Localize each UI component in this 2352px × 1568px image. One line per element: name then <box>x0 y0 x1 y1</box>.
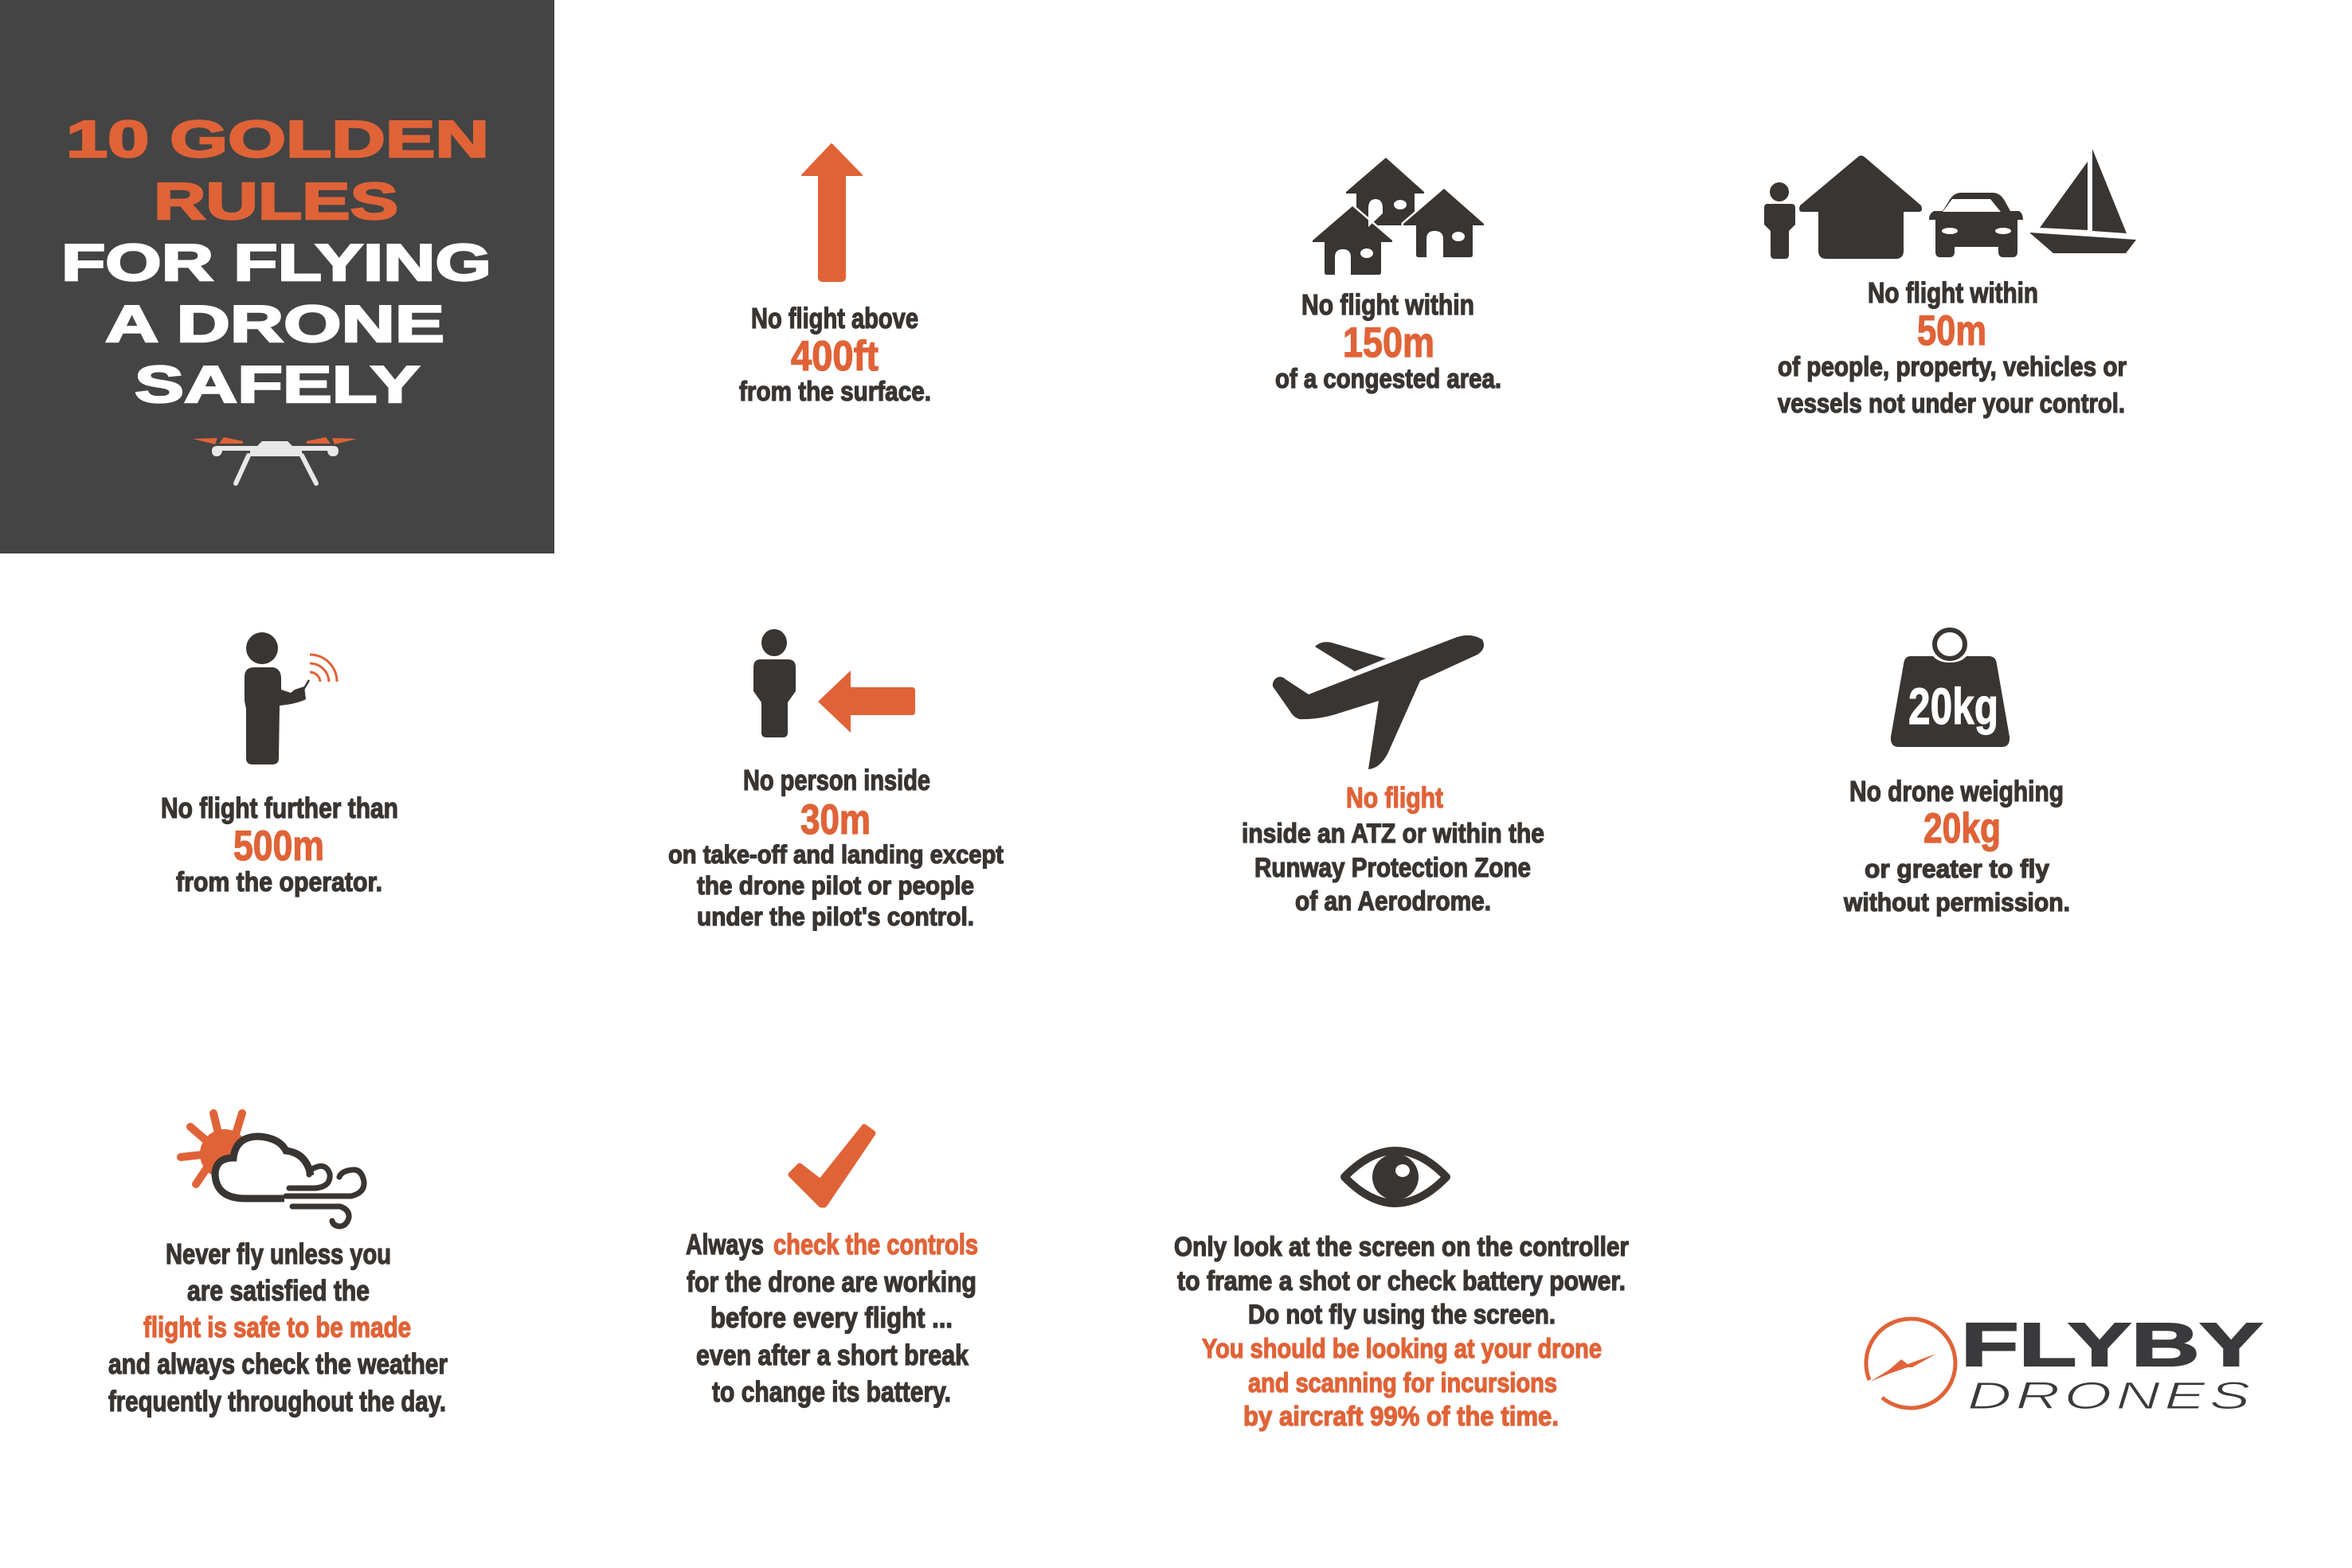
text: rule weather: and always check the weather <box>108 1347 448 1380</box>
text: rule weather <box>108 1238 448 1417</box>
icon: houses <box>1313 158 1484 275</box>
panel: rule aerodrome <box>1242 635 1544 917</box>
icon: operator with controller <box>245 632 337 764</box>
title <box>61 110 491 413</box>
text: rule screen: and scanning for incursions <box>1248 1368 1557 1398</box>
icon: drone <box>193 437 357 483</box>
icon: person <box>1764 182 1795 259</box>
panel: rule weather <box>108 1113 448 1417</box>
text: rule 50m: 50m <box>1917 307 1986 354</box>
icon group: person and arrow <box>753 629 915 737</box>
text: rule 30m: No person inside <box>743 764 930 796</box>
text: rule aerodrome: Runway Protection Zone <box>1254 853 1531 883</box>
text: rule weather: flight is safe to be made <box>143 1311 411 1343</box>
text: rule aerodrome <box>1242 781 1544 917</box>
icon: airplane <box>1273 635 1484 769</box>
text: rule 20kg: No drone weighing <box>1849 775 2064 807</box>
text: rule 50m <box>1778 276 2127 419</box>
logo: Flyby Drones <box>1866 1311 2263 1417</box>
icon: up arrow <box>802 144 862 281</box>
text: rule 50m: of people, property, vehicles or <box>1778 352 2127 382</box>
icon: weight <box>1891 630 2010 747</box>
icon: check mark <box>791 1127 873 1205</box>
icon: eye <box>1344 1151 1446 1203</box>
text: rule 400ft: from the surface. <box>739 377 931 407</box>
text: rule 150m <box>1275 288 1501 394</box>
icon: sailboat <box>2029 149 2136 253</box>
logo wordmark: DRONES <box>1967 1374 2251 1417</box>
panel: rule 30m <box>668 629 1004 931</box>
text: rule 400ft <box>739 302 931 407</box>
text: rule 50m: vessels not under your control. <box>1778 389 2125 419</box>
logo wordmark <box>1961 1311 2263 1417</box>
text: rule 400ft: No flight above <box>751 302 918 334</box>
text: rule 150m: No flight within <box>1301 288 1474 321</box>
text: rule 20kg <box>1843 775 2070 917</box>
icon: sun, cloud and wind <box>181 1113 364 1226</box>
title: 10 GOLDEN <box>66 110 489 168</box>
text: rule controls: check the controls <box>773 1228 978 1261</box>
text: rule screen: You should be looking at your drone <box>1202 1334 1602 1364</box>
panel: rule controls <box>686 1127 978 1408</box>
text: rule 500m: 500m <box>233 823 324 870</box>
text: rule 150m: 150m <box>1343 319 1434 366</box>
icon: logo ring <box>1866 1319 1955 1408</box>
text: rule controls <box>686 1228 978 1408</box>
panel: rule 150m <box>1275 158 1501 394</box>
panel: rule 50m <box>1764 149 2136 419</box>
panel: rule 20kg <box>1843 630 2070 917</box>
icon: car <box>1929 193 2023 257</box>
text: rule weather: frequently throughout the day. <box>108 1385 446 1417</box>
logo wordmark: FLYBY <box>1961 1311 2263 1379</box>
text: rule 500m <box>161 792 398 897</box>
icon: person <box>753 629 796 737</box>
icon: house <box>1799 155 1922 259</box>
text: rule controls: to change its battery. <box>712 1375 951 1408</box>
icon: weight: 20kg <box>1908 678 1998 735</box>
title: RULES <box>154 172 398 230</box>
text: rule 30m: under the pilot's control. <box>697 902 974 931</box>
text: rule weather: are satisfied the <box>187 1274 370 1307</box>
text: rule 50m: No flight within <box>1868 276 2038 309</box>
text: rule aerodrome: No flight <box>1346 781 1443 814</box>
text: rule controls: even after a short break <box>696 1339 969 1371</box>
text: rule 500m: from the operator. <box>176 867 382 897</box>
text: rule weather: Never fly unless you <box>166 1238 391 1270</box>
icon: left arrow <box>818 671 915 733</box>
text: rule 30m: 30m <box>800 796 871 843</box>
text: rule screen: Only look at the screen on the controller <box>1174 1232 1629 1262</box>
text: rule screen: to frame a shot or check battery power. <box>1177 1266 1626 1296</box>
text: rule controls: for the drone are working <box>687 1265 976 1298</box>
panel: rule 400ft <box>739 144 931 407</box>
panel: rule screen <box>1174 1151 1629 1432</box>
text: rule aerodrome: inside an ATZ or within the <box>1242 819 1544 849</box>
icon group: person, house, car, sailboat <box>1764 149 2136 259</box>
text: rule screen: Do not fly using the screen. <box>1248 1300 1556 1330</box>
text: rule 20kg: without permission. <box>1843 888 2070 917</box>
text: rule 150m: of a congested area. <box>1275 364 1501 394</box>
text: rule controls: Always <box>686 1228 764 1261</box>
panel: title block <box>0 0 554 553</box>
text: rule 30m <box>668 764 1004 931</box>
title: FOR FLYING <box>61 233 491 291</box>
title: A DRONE <box>105 295 444 353</box>
text: rule 20kg: or greater to fly <box>1865 854 2049 883</box>
text: rule aerodrome: of an Aerodrome. <box>1295 886 1491 917</box>
text: rule controls: before every flight ... <box>710 1301 953 1334</box>
text: rule screen <box>1174 1232 1629 1432</box>
text: rule screen: by aircraft 99% of the time. <box>1243 1402 1559 1432</box>
text: rule 30m: on take-off and landing except <box>668 840 1004 869</box>
text: rule 20kg: 20kg <box>1923 805 2001 852</box>
text: rule 500m: No flight further than <box>161 792 398 824</box>
text: rule 30m: the drone pilot or people <box>697 871 974 900</box>
title: SAFELY <box>135 355 420 413</box>
text: rule 400ft: 400ft <box>791 333 879 380</box>
panel: rule 500m <box>161 632 398 897</box>
